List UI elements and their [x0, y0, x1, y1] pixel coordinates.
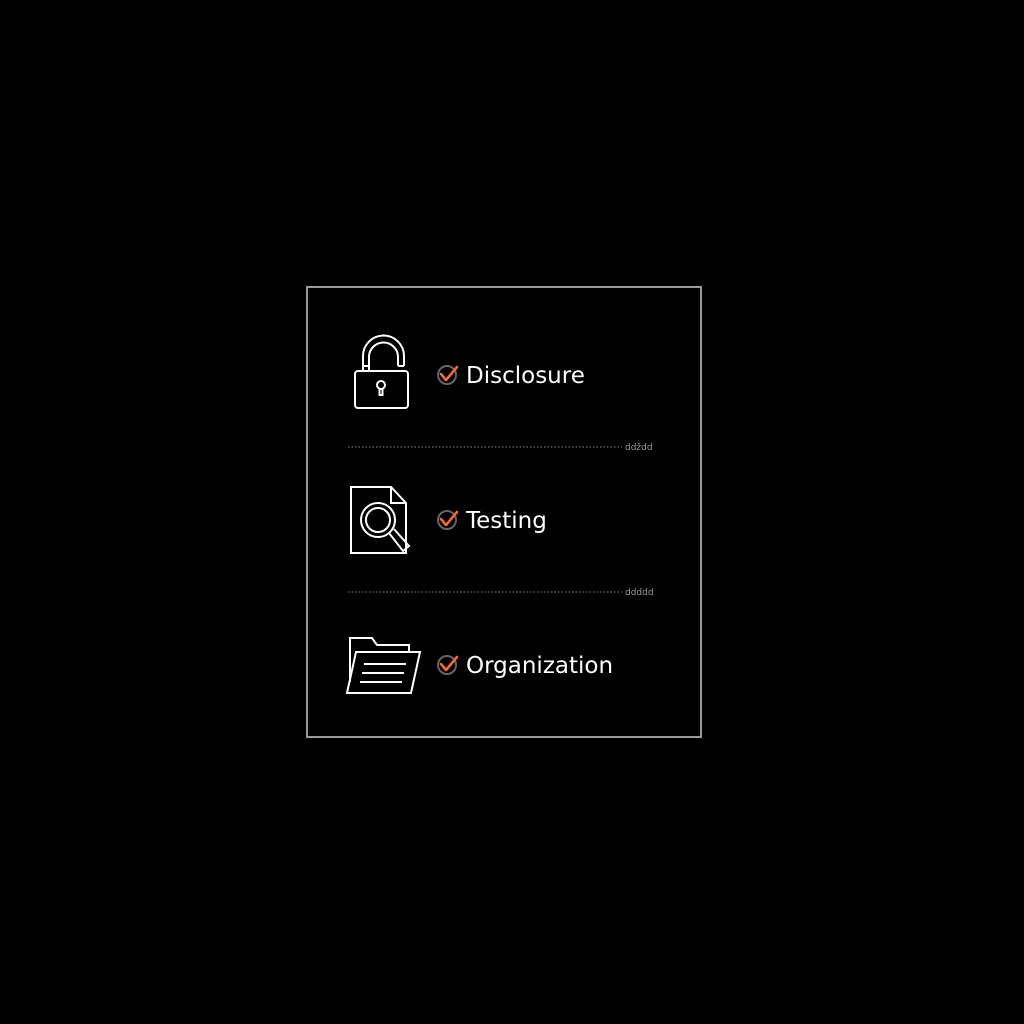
- divider 1: ddždd: [625, 443, 653, 453]
- panel: checklist: [307, 287, 701, 737]
- divider 2: ddddd: [625, 588, 654, 598]
- item: Organization: Organization: [466, 653, 613, 679]
- item: Testing: Testing: [465, 508, 547, 534]
- icon: padlock: [355, 336, 408, 408]
- item: Disclosure: Disclosure: [466, 363, 585, 389]
- icon: document with magnifier: [351, 487, 409, 553]
- icon: folder: [347, 638, 420, 693]
